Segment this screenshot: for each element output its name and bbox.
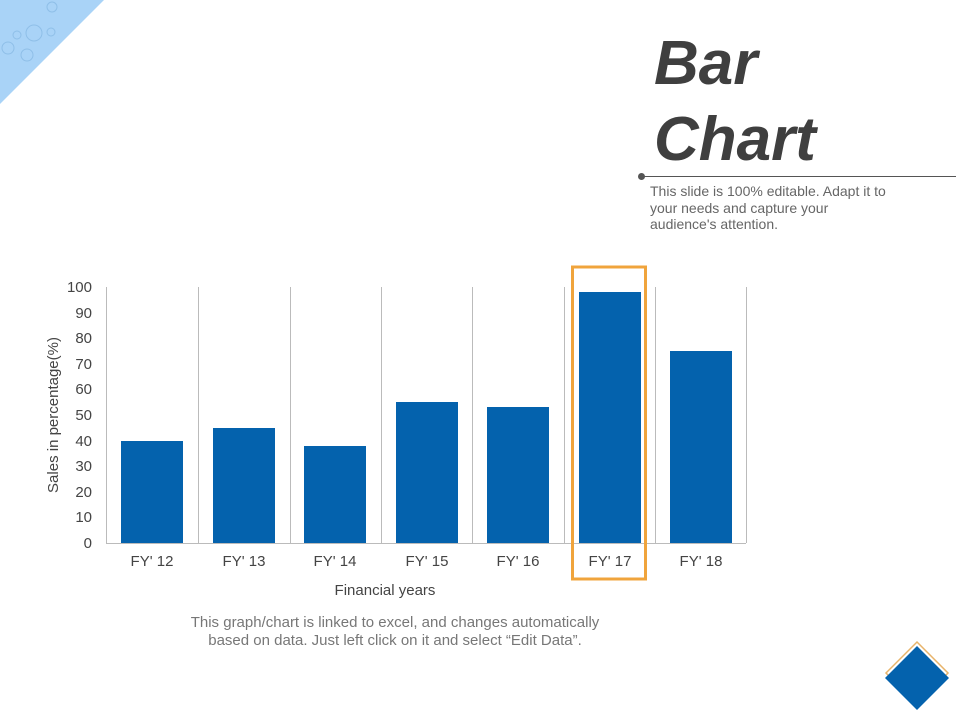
caption text: This graph/chart is linked to excel, and changes automatically based on data. Just left click on it and select “Edit Data”. (191, 614, 599, 649)
bar chart: 40 (75, 433, 92, 450)
icon: diamond (885, 641, 949, 710)
bar chart: FY' 12 (131, 553, 173, 570)
bar chart: 50 (75, 407, 92, 424)
bar chart: 0 (84, 535, 92, 552)
bar chart: 100 (67, 279, 92, 296)
bar chart: FY' 17 (589, 553, 631, 570)
bar chart: 80 (75, 330, 92, 347)
bar chart: 90 (75, 305, 92, 322)
bar chart: 30 (75, 458, 92, 475)
title: Bar (654, 29, 757, 98)
title (654, 29, 818, 174)
bar chart: 70 (75, 356, 92, 373)
bar chart: FY' 14 (314, 553, 356, 570)
bar chart: FY' 18 (680, 553, 722, 570)
bar chart: FY' 16 (497, 553, 539, 570)
bar chart: 10 (75, 509, 92, 526)
subtitle text: audience's attention. (650, 216, 778, 232)
subtitle text (650, 183, 886, 232)
bar chart: 20 (75, 484, 92, 501)
bar chart: FY' 15 (406, 553, 448, 570)
subtitle text: your needs and capture your (650, 200, 828, 216)
bar chart: FY' 13 (223, 553, 265, 570)
decorative corner triangle (0, 0, 104, 104)
bar chart: Sales in percentage(%) (45, 337, 62, 493)
title: Chart (654, 105, 816, 174)
subtitle text: This slide is 100% editable. Adapt it to (650, 183, 886, 199)
bar chart: Financial years (335, 582, 435, 599)
divider with dot (642, 176, 956, 177)
bar chart: 60 (75, 381, 92, 398)
